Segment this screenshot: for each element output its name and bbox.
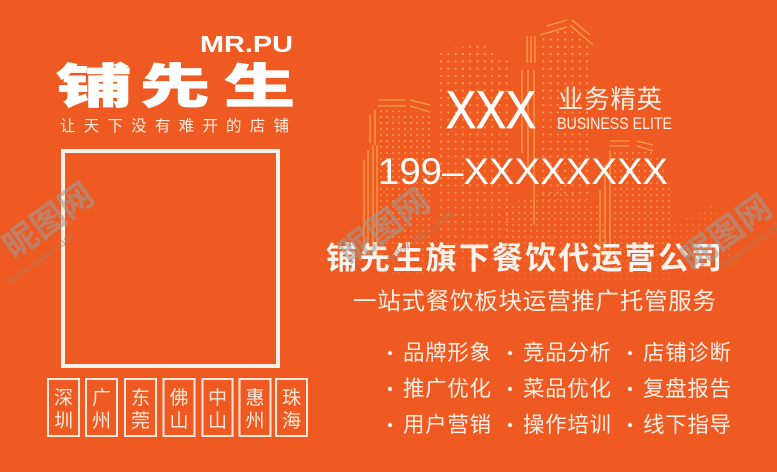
name: XXX: XXX — [446, 81, 536, 140]
job title: English: BUSINESS ELITE — [557, 114, 672, 133]
service row 1 — [388, 336, 731, 367]
city: 深圳 — [48, 379, 79, 436]
city: 佛山: 山 — [169, 406, 189, 433]
city: 惠州 — [240, 379, 270, 436]
city: 广州 — [86, 379, 117, 436]
city: 广州: 广 — [92, 383, 111, 410]
city: 东莞: 东 — [131, 383, 150, 410]
city tags — [48, 379, 307, 436]
job title — [557, 79, 672, 133]
photo frame — [63, 151, 278, 366]
watermarks: www.nipic.com — [4, 231, 76, 288]
logo: 铺先生 — [56, 48, 295, 117]
service row 2: 菜品优化 — [523, 372, 611, 403]
service row 3: 操作培训 — [523, 408, 611, 439]
city: 深圳: 圳 — [54, 406, 73, 433]
logo — [56, 31, 295, 136]
logo: 铺先生: 铺 — [56, 48, 132, 117]
logo tagline: 让天下没有难开的店铺 — [60, 114, 289, 136]
service row 3: 用户营销 — [403, 408, 491, 439]
city: 佛山 — [164, 379, 194, 436]
city: 珠海: 海 — [282, 406, 301, 433]
watermarks: 昵图网 — [327, 174, 438, 274]
logo: 铺先生: 生 — [224, 48, 295, 117]
city: 佛山: 佛 — [169, 383, 189, 410]
service row 2 — [388, 372, 731, 403]
city: 东莞: 莞 — [131, 406, 150, 433]
service row 3 — [388, 408, 731, 439]
service row 1: 品牌形象 — [403, 336, 491, 367]
service list — [388, 336, 731, 439]
city: 东莞 — [125, 379, 156, 436]
logo: MR.PU: MR.PU — [200, 31, 293, 57]
job title: Chinese: 业务精英 — [558, 79, 662, 116]
city: 惠州: 州 — [245, 406, 265, 433]
service row 3: 线下指导 — [643, 408, 731, 439]
phone number: 199–XXXXXXXX — [378, 151, 668, 192]
watermarks — [0, 168, 777, 288]
service row 1: 竞品分析 — [523, 336, 611, 367]
logo: 铺先生: 先 — [140, 48, 210, 117]
city: 珠海 — [276, 379, 307, 436]
service row 2: 推广优化 — [403, 372, 491, 403]
subheading: 一站式餐饮板块运营推广托管服务 — [353, 282, 716, 316]
city: 广州: 州 — [92, 406, 111, 433]
skyline illustration — [364, 20, 735, 280]
watermarks: www.nipic.com — [384, 208, 456, 265]
service row 1: 店铺诊断 — [643, 336, 731, 367]
service row 2: 复盘报告 — [643, 372, 731, 403]
city: 珠海: 珠 — [282, 383, 301, 410]
city: 惠州: 惠 — [245, 383, 265, 410]
main heading: 铺先生旗下餐饮代运营公司 — [326, 233, 722, 278]
city: 中山 — [202, 379, 232, 436]
city: 中山: 中 — [208, 383, 227, 410]
city: 中山: 山 — [208, 406, 227, 433]
city: 深圳: 深 — [54, 383, 73, 410]
